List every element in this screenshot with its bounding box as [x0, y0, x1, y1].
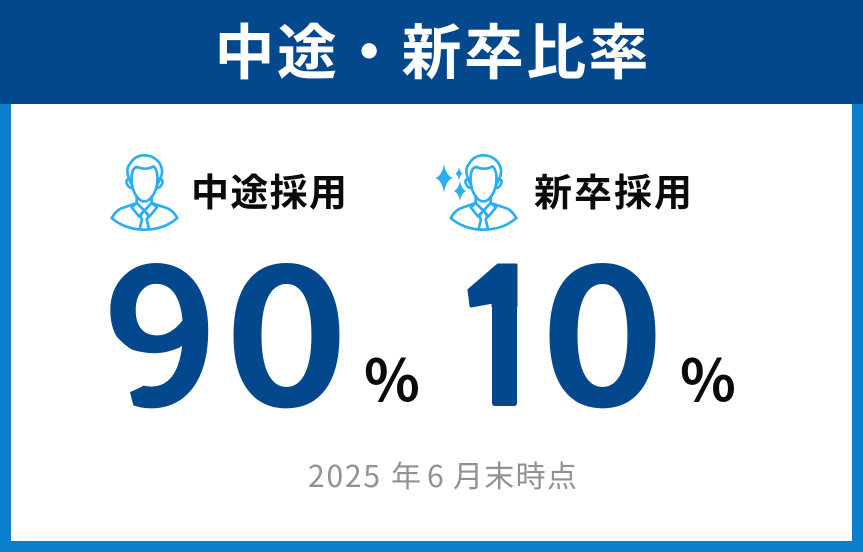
- number: 90: 0: [228, 193, 345, 454]
- number: 10: [468, 263, 656, 408]
- number: 10: 1: [447, 192, 556, 460]
- label: mid-career hiring: 中途採用: [191, 162, 347, 217]
- title: 中途・新卒比率: [214, 5, 648, 92]
- footnote: as of date: 2025: [308, 452, 390, 496]
- number: 10: 0: [544, 193, 661, 454]
- percent sign left: %: [364, 334, 420, 418]
- number: 90: 9: [106, 193, 214, 455]
- label: new graduate hiring: 新卒採用: [534, 162, 692, 217]
- footnote: as of date: 6: [427, 452, 450, 496]
- footnote: as of date: 月末時点: [453, 452, 578, 496]
- percent sign right: %: [680, 334, 736, 418]
- header band: [0, 0, 863, 104]
- icon: new graduate person with sparkles: [435, 155, 516, 230]
- footnote: as of date: 年: [391, 452, 428, 496]
- icon: mid-career person: [112, 155, 177, 230]
- number: 90: [110, 263, 340, 408]
